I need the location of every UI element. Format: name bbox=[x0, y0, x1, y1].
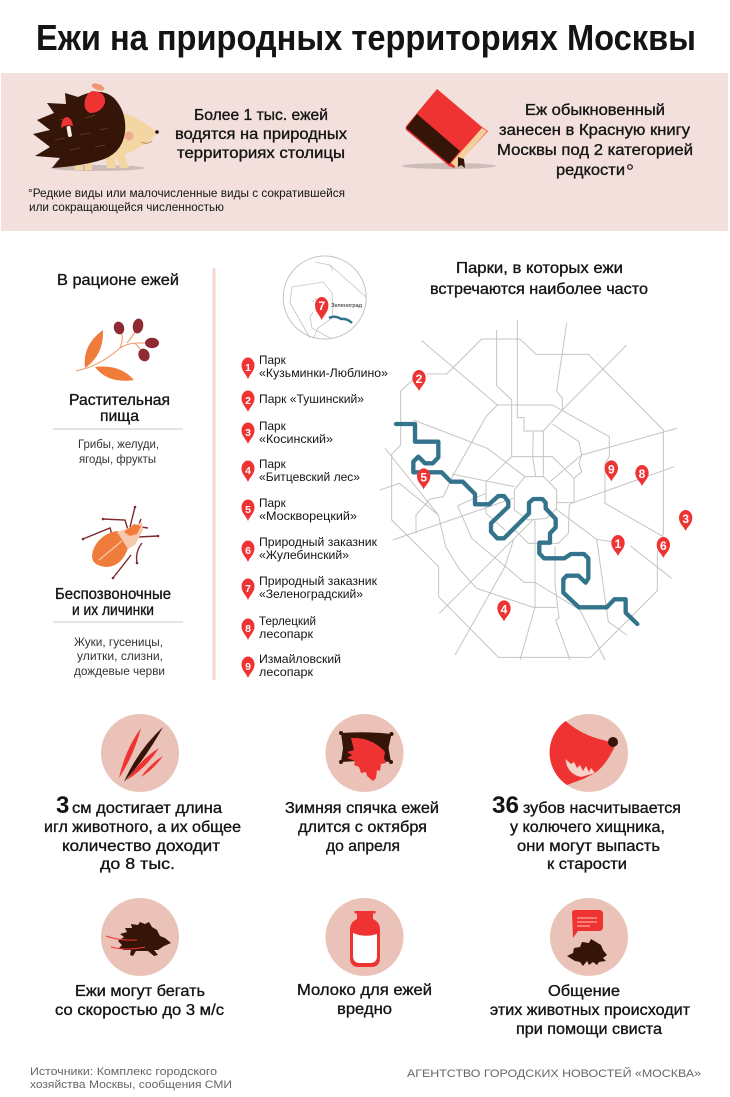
icon: mushroom bbox=[61, 117, 73, 137]
text: milk: Молоко для ежей bbox=[297, 982, 432, 999]
icon: red book bbox=[402, 89, 496, 169]
map pins: 8 bbox=[639, 467, 646, 481]
text: speed: со скоростью до 3 м/с bbox=[55, 1002, 224, 1019]
text: speed bbox=[55, 983, 224, 1019]
footnote: или сокращающейся численностью bbox=[29, 202, 224, 214]
agency credit: АГЕНТСТВО ГОРОДСКИХ НОВОСТЕЙ «МОСКВА» bbox=[407, 1067, 701, 1080]
fact: speed bbox=[55, 898, 224, 1019]
map pins: 4 bbox=[501, 602, 508, 616]
map legend: parks: «Москворецкий» bbox=[259, 509, 357, 523]
text: hedgehog count: водятся на природных bbox=[175, 126, 347, 143]
pin 7: 7 bbox=[318, 299, 325, 313]
map legend: parks: 7 bbox=[245, 583, 251, 595]
panel: summary facts bbox=[1, 73, 728, 231]
text: whistle: Общение bbox=[548, 983, 620, 1000]
map pins: 5 bbox=[420, 470, 427, 484]
text: invertebrates list: Жуки, гусеницы, bbox=[74, 637, 163, 649]
map legend: parks: «Кузьминки-Люблино» bbox=[259, 366, 388, 380]
sources: хозяйства Москвы, сообщения СМИ bbox=[30, 1079, 232, 1091]
text: milk: вредно bbox=[337, 1001, 392, 1018]
map pins: 2 bbox=[416, 372, 423, 386]
map legend: parks: Парк bbox=[259, 353, 287, 367]
map legend: parks: 4 bbox=[245, 465, 251, 477]
text: needles: игл животного, а их общее bbox=[44, 819, 241, 836]
text: teeth: 36 bbox=[492, 792, 519, 819]
map legend: parks: «Жулебинский» bbox=[259, 548, 349, 562]
locator map: Zelenograd: Зеленоград bbox=[331, 303, 363, 309]
text: red book: Еж обыкновенный bbox=[525, 102, 665, 119]
text: red book bbox=[497, 102, 693, 179]
locator map: Zelenograd bbox=[283, 256, 366, 339]
text: needles bbox=[44, 792, 241, 873]
map legend: parks bbox=[242, 353, 388, 679]
map legend: parks: Природный заказник bbox=[259, 535, 378, 549]
map legend: parks: Измайловский bbox=[259, 652, 341, 666]
icon: red snout bbox=[550, 714, 628, 792]
fact: hibernation bbox=[285, 714, 439, 855]
icon: needles bbox=[101, 714, 179, 792]
text: plant food list: Грибы, желуди, bbox=[78, 439, 159, 451]
map legend: parks: 2 bbox=[245, 395, 251, 407]
text: red book: редкости bbox=[556, 162, 625, 179]
text: whistle: при помощи свиста bbox=[516, 1021, 662, 1038]
text: hibernation: Зимняя спячка ежей bbox=[285, 800, 439, 817]
text: whistle: этих животных происходит bbox=[490, 1002, 691, 1019]
map legend: parks: Парк bbox=[259, 419, 287, 433]
river bbox=[396, 424, 637, 624]
map pins bbox=[412, 370, 692, 621]
map legend: parks: 8 bbox=[245, 623, 251, 635]
map legend: parks: Парк «Тушинский» bbox=[259, 392, 364, 406]
heading: plant food: Растительная bbox=[69, 392, 170, 409]
text: hedgehog count bbox=[175, 107, 347, 162]
map legend: parks: «Битцевский лес» bbox=[259, 470, 360, 484]
map legend: parks: лесопарк bbox=[259, 665, 314, 679]
text: whistle bbox=[490, 983, 691, 1038]
fact: teeth bbox=[492, 714, 681, 873]
text: needles: до 8 тыс. bbox=[100, 856, 175, 873]
heading: parks: встречаются наиболее часто bbox=[430, 281, 648, 298]
text: hibernation: до апреля bbox=[326, 838, 400, 855]
text: needles: 3 bbox=[56, 792, 69, 819]
text: hibernation bbox=[285, 800, 439, 855]
footnote bbox=[28, 188, 345, 214]
sources bbox=[30, 1066, 232, 1091]
text: hibernation: длится с октября bbox=[298, 819, 427, 836]
icon: hedgehog bbox=[33, 82, 159, 171]
fact: needles bbox=[44, 714, 241, 873]
footnote: °Редкие виды или малочисленные виды с сократившейся bbox=[28, 188, 345, 200]
map legend: parks: 6 bbox=[245, 545, 251, 557]
icon: pillow bbox=[326, 714, 404, 792]
heading: parks bbox=[430, 260, 648, 298]
map legend: parks: 3 bbox=[245, 427, 251, 439]
map pins: 9 bbox=[608, 462, 615, 476]
text: speed: Ежи могут бегать bbox=[75, 983, 205, 1000]
heading: diet: В рационе ежей bbox=[57, 272, 179, 289]
icon: berries branch bbox=[76, 318, 159, 381]
sources: Источники: Комплекс городского bbox=[30, 1066, 217, 1078]
icon: speech bubble and hedgehog bbox=[550, 898, 628, 976]
map legend: parks: Парк bbox=[259, 457, 287, 471]
icon: strawberry bbox=[85, 91, 105, 113]
map legend: parks: «Косинский» bbox=[259, 432, 333, 446]
text: teeth bbox=[492, 792, 681, 873]
text: teeth: к старости bbox=[547, 856, 627, 873]
heading: invertebrates: Беспозвоночные bbox=[55, 586, 171, 603]
heading: invertebrates: и их личинки bbox=[72, 602, 154, 619]
map legend: parks: 9 bbox=[245, 661, 251, 673]
map legend: parks: 1 bbox=[245, 362, 251, 374]
map legend: parks: Парк bbox=[259, 496, 287, 510]
heading: plant food: пища bbox=[100, 408, 139, 425]
map pins: 6 bbox=[660, 539, 667, 553]
map: Moscow parks bbox=[380, 320, 692, 660]
map legend: parks: 5 bbox=[245, 504, 251, 516]
panel: diet bbox=[53, 272, 183, 678]
text: invertebrates list bbox=[74, 637, 165, 678]
fact: milk bbox=[297, 898, 432, 1018]
text: needles: количество доходит bbox=[62, 838, 221, 855]
text: teeth: они могут выпасть bbox=[517, 838, 660, 855]
text: plant food list bbox=[78, 439, 159, 466]
map legend: parks: «Зеленоградский» bbox=[259, 587, 363, 601]
text: hedgehog count: территориях столицы bbox=[177, 145, 345, 162]
icon: running hedgehog bbox=[101, 898, 179, 976]
heading: plant food bbox=[69, 392, 170, 425]
text: teeth: у колючего хищника, bbox=[510, 819, 665, 836]
text: red book: Москвы под 2 категорией bbox=[497, 142, 693, 159]
map legend: parks: Природный заказник bbox=[259, 574, 378, 588]
text: hedgehog count: Более 1 тыс. ежей bbox=[194, 107, 328, 124]
text: invertebrates list: дождевые черви bbox=[74, 666, 165, 678]
text: teeth: зубов насчитывается bbox=[523, 800, 681, 817]
map pins: 1 bbox=[615, 537, 622, 551]
icon: beetle bbox=[82, 506, 159, 579]
map legend: parks: лесопарк bbox=[259, 627, 314, 641]
heading: invertebrates bbox=[55, 586, 171, 619]
text: invertebrates list: улитки, слизни, bbox=[77, 651, 163, 663]
heading: parks: Парки, в которых ежи bbox=[456, 260, 623, 277]
map pins: 3 bbox=[682, 512, 689, 526]
text: plant food list: ягоды, фрукты bbox=[79, 454, 156, 466]
fact: whistle bbox=[490, 898, 691, 1038]
text: red book: занесен в Красную книгу bbox=[499, 122, 690, 139]
text: needles: см достигает длина bbox=[72, 800, 222, 817]
icon: milk bottle bbox=[326, 898, 404, 976]
text: milk bbox=[297, 982, 432, 1018]
map legend: parks: Терлецкий bbox=[259, 614, 316, 628]
icon: leaf on top bbox=[91, 82, 105, 92]
